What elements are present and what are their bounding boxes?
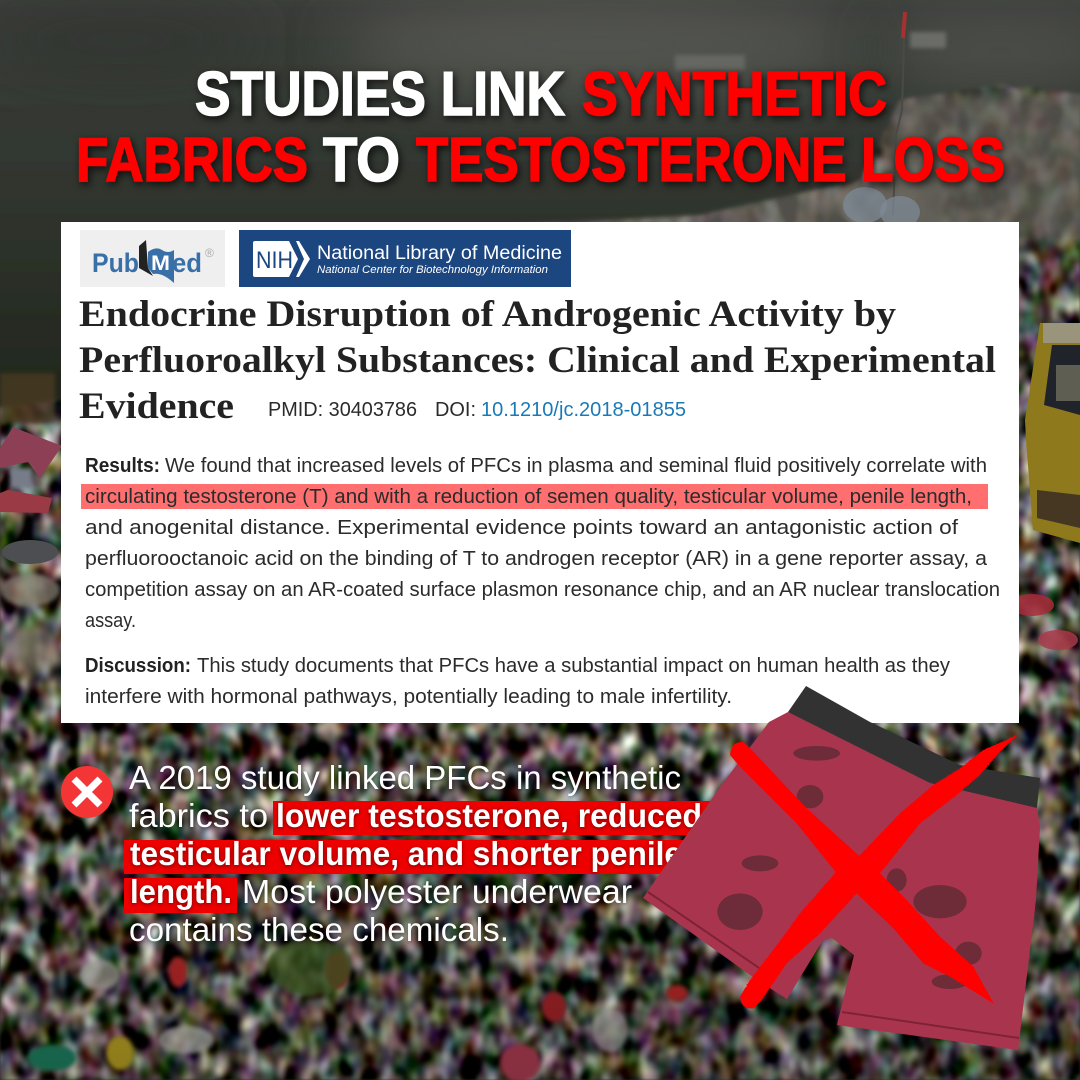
- summary text: fabrics to: [129, 797, 268, 834]
- summary text: [129, 759, 702, 948]
- logo: NIH National Library of Medicine: [239, 230, 571, 287]
- citation identifiers: 10.1210/jc.2018-01855: [481, 399, 686, 421]
- logo: PubMed: M: [151, 252, 170, 275]
- discussion text: [85, 655, 950, 708]
- red X mark: [730, 735, 1017, 1009]
- discussion text: Discussion:: [85, 655, 191, 677]
- highlight bars: [124, 801, 710, 913]
- results text: competition assay on an AR-coated surface plasmon resonance chip, and an AR nuclear translocation: [85, 579, 1000, 601]
- underwear seams and hem: [648, 892, 1019, 1038]
- citation identifiers: PMID: 30403786: [268, 399, 417, 421]
- logo: NIH National Library of Medicine: NIH: [256, 247, 293, 274]
- discussion text: This study documents that PFCs have a substantial impact on human health as they: [197, 655, 950, 677]
- results text: [85, 455, 1000, 632]
- title: SYNTHETIC: [582, 60, 887, 129]
- results text: circulating testosterone (T) and with a reduction of semen quality, testicular volume, penile length,: [85, 486, 972, 508]
- title: TO: [323, 126, 400, 195]
- illustration: stained red underwear crossed out: [643, 686, 1040, 1050]
- article heading: Endocrine Disruption of Androgenic Activity by: [79, 294, 897, 335]
- article heading: Evidence: [79, 386, 234, 427]
- title: STUDIES LINK: [195, 60, 565, 129]
- article heading: [79, 294, 996, 427]
- icon: red circle with white X: [61, 766, 113, 818]
- results text: and anogenital distance. Experimental evidence points toward an antagonistic action of: [85, 517, 959, 539]
- article heading: Perfluoroalkyl Substances: Clinical and Experimental: [79, 340, 996, 381]
- stains: [717, 746, 982, 989]
- summary text: lower testosterone, reduced: [276, 797, 702, 834]
- results text: Results:: [85, 455, 160, 477]
- discussion text: interfere with hormonal pathways, potentially leading to male infertility.: [85, 686, 732, 708]
- results highlight: [81, 484, 988, 509]
- title: [76, 60, 1005, 195]
- excavator: [1025, 323, 1080, 543]
- summary text: length.: [130, 873, 232, 910]
- summary text: Most polyester underwear: [242, 873, 632, 910]
- results text: perfluorooctanoic acid on the binding of T to androgen receptor (AR) in a gene reporter assay, a: [85, 548, 988, 570]
- logo: NIH National Library of Medicine: National Center for Biotechnology Information: [317, 264, 548, 276]
- logo: PubMed: Pub: [92, 248, 139, 278]
- stains and red X: [717, 735, 1017, 1009]
- callout: study summary: [124, 759, 710, 948]
- title: FABRICS: [76, 126, 308, 195]
- logo: NIH National Library of Medicine: National Library of Medicine: [317, 243, 562, 264]
- summary text: testicular volume, and shorter penile: [130, 835, 682, 872]
- results text: assay.: [85, 610, 136, 632]
- panel: PubMed study screenshot: [61, 222, 1019, 723]
- underwear body: [643, 712, 1040, 1050]
- results text: We found that increased levels of PFCs in plasma and seminal fluid positively correlate with: [165, 455, 987, 477]
- logo: PubMed: [80, 230, 225, 287]
- summary text: contains these chemicals.: [129, 911, 509, 948]
- summary text: A 2019 study linked PFCs in synthetic: [129, 759, 681, 796]
- waistband: [788, 686, 1040, 808]
- citation identifiers: DOI:: [435, 399, 476, 421]
- citation identifiers: [268, 399, 686, 421]
- logo: PubMed: ed: [172, 248, 202, 278]
- logo: PubMed: ®: [205, 246, 214, 260]
